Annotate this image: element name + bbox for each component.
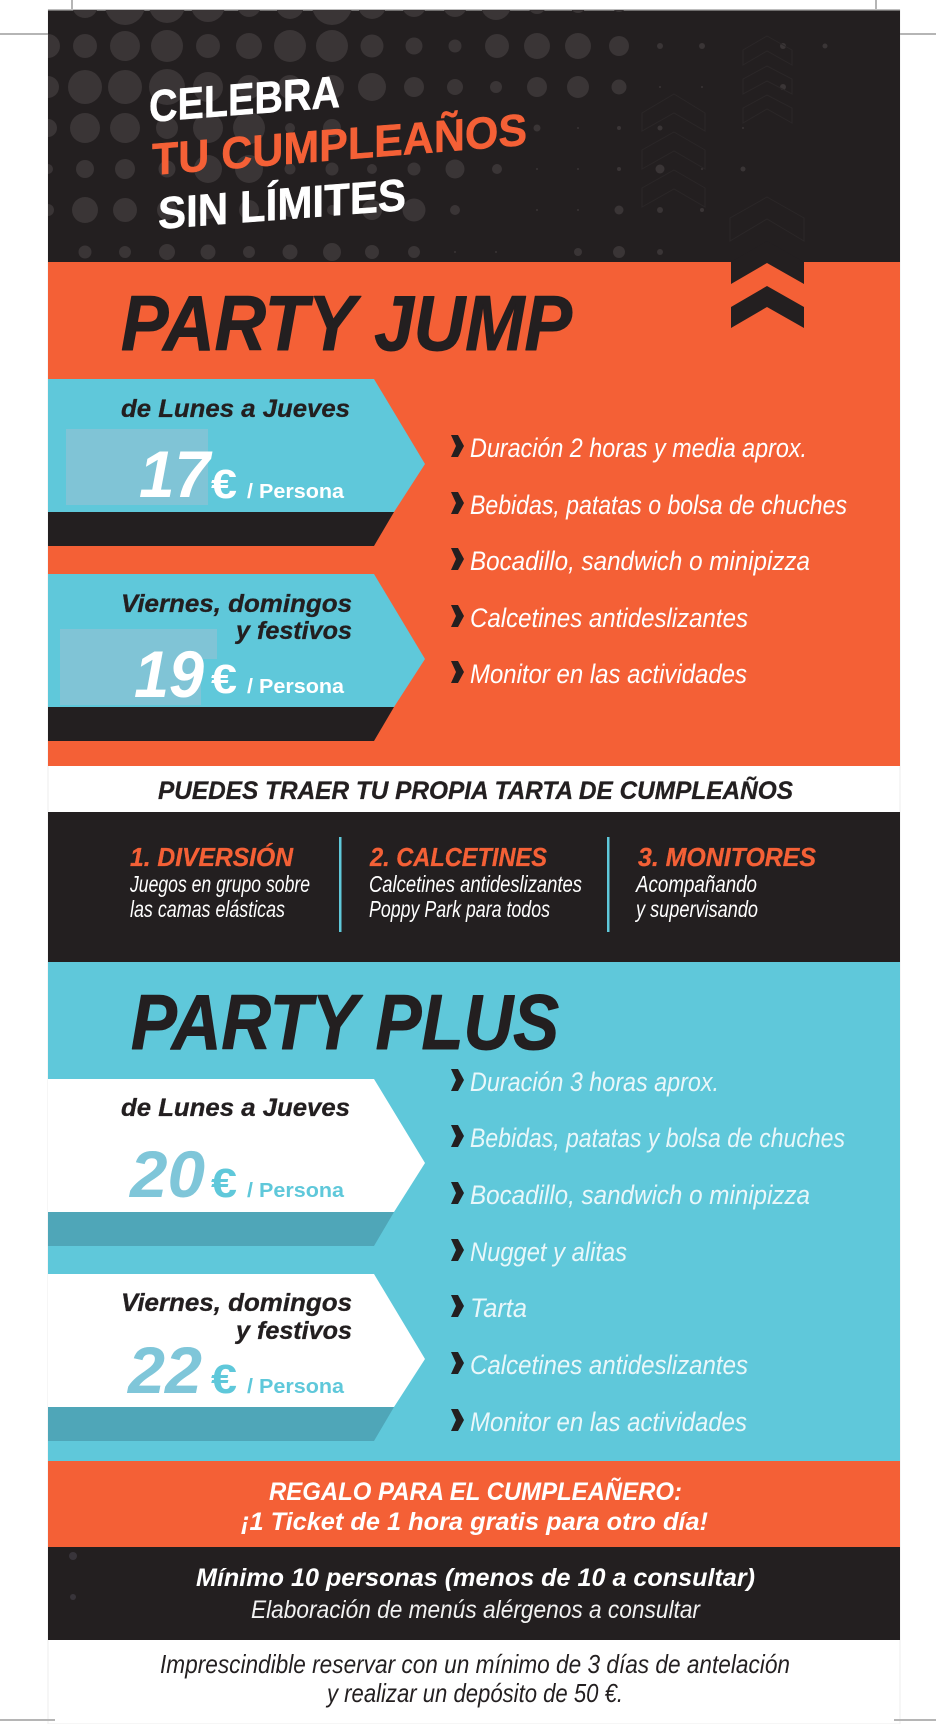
features list: party jump: Bocadillo, sandwich o minipizza <box>470 546 810 576</box>
price tag: lunes a jueves <box>48 379 425 546</box>
footer note: Imprescindible reservar con un mínimo de 3 días de antelación <box>160 1649 790 1679</box>
price tag: viernes domingos festivos: Viernes, domingos <box>121 590 352 618</box>
panel: regalo: REGALO PARA EL CUMPLEAÑERO: <box>269 1476 682 1506</box>
highlight: diversión: 1. DIVERSIÓN <box>130 842 294 872</box>
highlight: monitores: y supervisando <box>634 896 758 922</box>
features list: party jump: Bebidas, patatas o bolsa de chuches <box>470 490 847 520</box>
price tag: viernes domingos festivos: € <box>211 1356 237 1402</box>
title: CELEBRA <box>149 66 340 132</box>
faint chevrons <box>642 36 804 241</box>
features list: party plus: Nugget y alitas <box>470 1237 627 1267</box>
highlight: diversión <box>129 842 310 922</box>
price tag: lunes a jueves <box>48 1079 425 1246</box>
price tag: viernes domingos festivos: 19 <box>134 637 204 711</box>
features list: party jump: Calcetines antideslizantes <box>470 603 748 633</box>
halftone dots <box>36 0 828 261</box>
banner: tarta: PUEDES TRAER TU PROPIA TARTA DE CUMPLEAÑOS <box>158 775 793 805</box>
title: SIN LÍMITES <box>158 169 406 239</box>
price tag: lunes a jueves: / Persona <box>247 481 345 503</box>
price tag: lunes a jueves: de Lunes a Jueves <box>121 395 350 423</box>
price tag: viernes domingos festivos: 22 <box>126 1333 202 1407</box>
price tag: lunes a jueves: € <box>211 461 237 507</box>
price tag: lunes a jueves: € <box>211 1160 237 1206</box>
price tag: viernes domingos festivos: / Persona <box>247 676 345 698</box>
highlight: calcetines: 2. CALCETINES <box>369 842 548 872</box>
title: TU CUMPLEAÑOS <box>152 104 527 185</box>
heading: party jump: PARTY JUMP <box>121 279 573 367</box>
highlight: calcetines: Calcetines antideslizantes <box>369 871 582 897</box>
highlight: calcetines: Poppy Park para todos <box>369 896 550 922</box>
highlight: diversión: Juegos en grupo sobre <box>129 871 310 897</box>
features list: party plus: Bocadillo, sandwich o minipizza <box>470 1180 810 1210</box>
panel: mínimo personas: Elaboración de menús alérgenos a consultar <box>251 1596 702 1624</box>
price tag: lunes a jueves: / Persona <box>247 1180 345 1202</box>
features list: party jump <box>451 433 847 689</box>
price tag: viernes domingos festivos: y festivos <box>234 1317 352 1345</box>
features list: party plus: Calcetines antideslizantes <box>470 1350 748 1380</box>
title <box>149 66 527 239</box>
footer note: y realizar un depósito de 50 €. <box>325 1678 623 1708</box>
panel: party jump <box>48 241 900 766</box>
features list: party plus: Tarta <box>470 1293 527 1323</box>
price tag: lunes a jueves: 17 <box>139 437 213 511</box>
price tag: viernes domingos festivos: € <box>211 656 237 702</box>
highlight: monitores: Acompañando <box>634 871 757 897</box>
features list: party plus: Duración 3 horas aprox. <box>470 1067 719 1097</box>
price tag: lunes a jueves: de Lunes a Jueves <box>121 1094 350 1122</box>
price tag: lunes a jueves: 20 <box>128 1137 205 1211</box>
price tag: viernes domingos festivos <box>48 1274 425 1441</box>
features list: party plus: Monitor en las actividades <box>470 1407 747 1437</box>
icon: double chevron <box>731 241 804 328</box>
panel: regalo <box>48 1461 900 1547</box>
panel: mínimo personas: Mínimo 10 personas (menos de 10 a consultar) <box>196 1564 755 1592</box>
highlight: diversión: las camas elásticas <box>130 896 285 922</box>
features list: party jump: Monitor en las actividades <box>470 659 747 689</box>
heading: party plus: PARTY PLUS <box>131 978 559 1066</box>
price tag: viernes domingos festivos <box>48 574 425 741</box>
panel: highlights <box>48 812 900 962</box>
panel: party plus <box>48 962 900 1461</box>
highlight: calcetines <box>369 842 582 922</box>
price tag: viernes domingos festivos: Viernes, domingos <box>121 1289 352 1317</box>
panel: regalo: ¡1 Ticket de 1 hora gratis para otro día! <box>241 1508 708 1536</box>
features list: party plus: Bebidas, patatas y bolsa de chuches <box>470 1123 845 1153</box>
panel: mínimo personas <box>48 1547 900 1640</box>
footer note <box>160 1649 790 1708</box>
features list: party jump: Duración 2 horas y media aprox. <box>470 433 807 463</box>
price tag: viernes domingos festivos: / Persona <box>247 1376 345 1398</box>
features list: party plus <box>451 1067 845 1437</box>
highlight: monitores <box>634 842 817 922</box>
price tag: viernes domingos festivos: y festivos <box>234 617 352 645</box>
panel: header <box>36 0 900 262</box>
highlight: monitores: 3. MONITORES <box>638 842 817 872</box>
